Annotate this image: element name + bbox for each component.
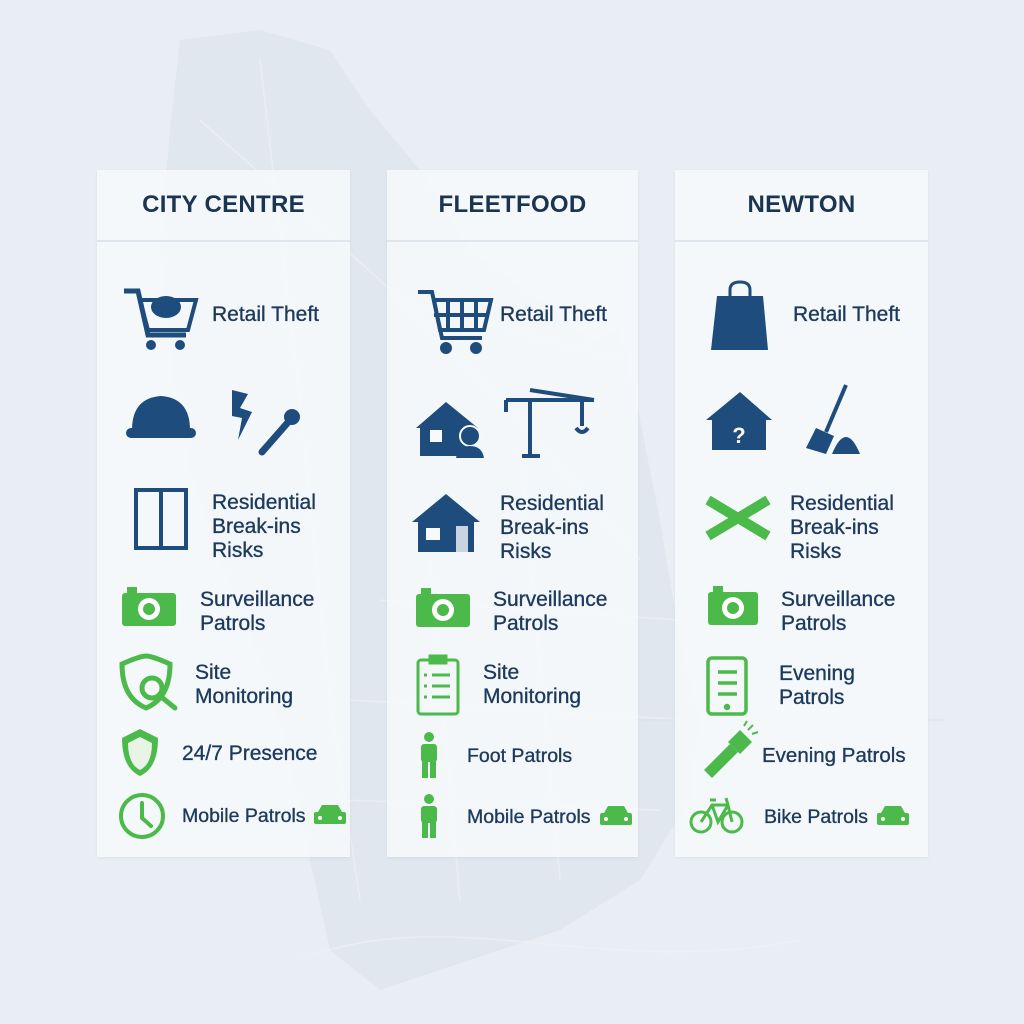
- icon: flashlight: [704, 721, 758, 778]
- text: Foot Patrols: [467, 745, 572, 767]
- panel: city centre: [97, 170, 350, 857]
- text: Patrols: [781, 612, 846, 635]
- icon: shield: [122, 729, 158, 776]
- icon: car (fleetfood): [600, 806, 632, 825]
- icon: cart with mask (city centre): [124, 291, 196, 350]
- text: Patrols: [200, 612, 265, 635]
- heading: newton: [675, 170, 928, 242]
- text: Site: [195, 661, 231, 684]
- icon: bolt and wrench: [232, 390, 300, 452]
- text: fleetfood items: Retail Theft: [500, 303, 607, 326]
- text: Residential: [500, 492, 604, 515]
- heading: city centre: CITY CENTRE: [142, 191, 305, 218]
- heading: newton: NEWTON: [747, 191, 856, 218]
- icon: car (newton): [877, 806, 909, 825]
- icon: person (mobile): [421, 794, 437, 838]
- icon: house with question: ?: [732, 423, 746, 448]
- icon: shield magnifier: [122, 656, 175, 708]
- text: Patrols: [779, 686, 844, 709]
- icon: tablet: [708, 658, 746, 714]
- text: Bike Patrols: [764, 806, 868, 828]
- icon: shovel: [806, 385, 860, 454]
- text: newton items: Retail Theft: [793, 303, 900, 326]
- text: Break-ins: [500, 516, 589, 539]
- icon: clock: [121, 795, 163, 837]
- heading: fleetfood: [387, 170, 638, 242]
- text: Surveillance: [493, 588, 607, 611]
- icon: person (foot): [421, 732, 437, 778]
- text: Surveillance: [781, 588, 895, 611]
- icon: car (city): [314, 805, 346, 824]
- icon: hard hat: [126, 396, 196, 438]
- text: Residential: [790, 492, 894, 515]
- text: city centre items: Retail Theft: [212, 303, 319, 326]
- icon: shopping bag: [711, 282, 768, 350]
- text: Break-ins: [790, 516, 879, 539]
- text: Risks: [790, 540, 841, 563]
- text: Evening: [779, 662, 855, 685]
- text: Risks: [212, 539, 263, 562]
- text: Monitoring: [483, 685, 581, 708]
- icon: camera (city): [122, 587, 176, 626]
- icon: bicycle: [691, 798, 742, 832]
- icon: crane: [506, 390, 594, 456]
- text: 24/7 Presence: [182, 742, 317, 765]
- text: Evening Patrols: [762, 744, 906, 767]
- panel: newton: [675, 170, 928, 857]
- text: Residential: [212, 491, 316, 514]
- text: Risks: [500, 540, 551, 563]
- panel: fleetfood: [387, 170, 638, 857]
- text: Patrols: [493, 612, 558, 635]
- icon: house with burglar: [416, 402, 484, 458]
- icon: clipboard: [418, 656, 458, 714]
- icon: caution tape: [708, 500, 768, 536]
- icon: camera (fleetfood): [416, 588, 470, 627]
- text: Monitoring: [195, 685, 293, 708]
- icon: house with question: [706, 392, 772, 450]
- icon: broken window: [136, 490, 186, 548]
- icon: cart (fleetfood): [418, 292, 491, 352]
- text: Site: [483, 661, 519, 684]
- heading: city centre: [97, 170, 350, 242]
- text: Mobile Patrols: [467, 806, 591, 828]
- icon: camera (newton): [708, 586, 758, 625]
- heading: fleetfood: FLEETFOOD: [438, 191, 587, 218]
- icon: house with figure: [412, 494, 480, 552]
- text: Surveillance: [200, 588, 314, 611]
- text: Break-ins: [212, 515, 301, 538]
- text: Mobile Patrols: [182, 805, 306, 827]
